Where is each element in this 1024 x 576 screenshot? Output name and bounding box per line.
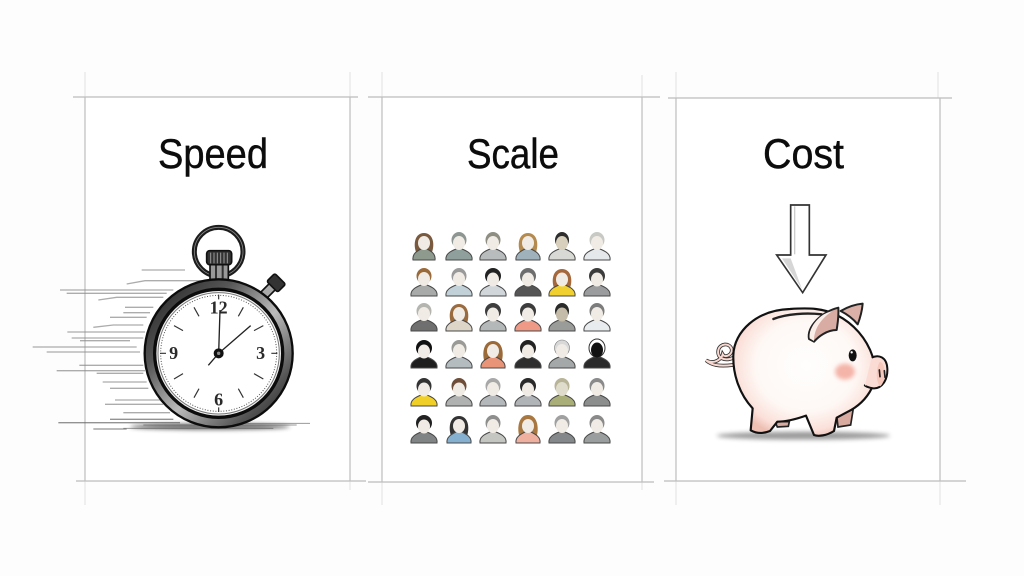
crown — [207, 251, 232, 265]
row 6 — [411, 415, 610, 443]
row 1 — [413, 232, 610, 260]
heading: scale: Scale — [467, 130, 559, 177]
heading: speed: Speed — [158, 130, 268, 177]
body — [733, 308, 873, 436]
hands — [208, 310, 251, 365]
icon: stopwatch with motion lines — [33, 227, 310, 430]
stem — [210, 263, 228, 282]
far ear — [841, 304, 863, 324]
dial numbers: 9 — [169, 343, 178, 363]
near ear — [809, 308, 838, 342]
row 2 — [411, 268, 610, 296]
pusher — [255, 273, 286, 304]
icon: downward arrow — [777, 205, 826, 293]
ground shadow — [130, 424, 290, 430]
heading: cost: Cost — [763, 130, 844, 177]
people grid — [411, 232, 610, 443]
far legs — [775, 408, 853, 427]
row 5 — [411, 378, 610, 406]
ring — [194, 227, 243, 276]
panel: scale — [368, 72, 660, 505]
dial numbers: 6 — [214, 390, 223, 410]
snout — [865, 356, 887, 388]
panel: speed — [33, 72, 366, 505]
motion lines — [33, 270, 203, 429]
dial numbers — [169, 298, 265, 410]
tail — [706, 344, 733, 366]
ground shadow — [717, 432, 890, 440]
panel: cost — [664, 72, 966, 505]
row 4 — [411, 339, 610, 368]
dial numbers: 12 — [210, 298, 228, 318]
dial — [158, 293, 279, 414]
case — [145, 279, 293, 427]
hour ticks — [160, 295, 277, 412]
icon: piggy bank — [706, 304, 890, 440]
dial numbers: 3 — [256, 343, 265, 363]
row 3 — [411, 303, 610, 331]
coin slot — [773, 314, 822, 319]
cheek — [835, 364, 855, 380]
eye — [849, 349, 857, 361]
